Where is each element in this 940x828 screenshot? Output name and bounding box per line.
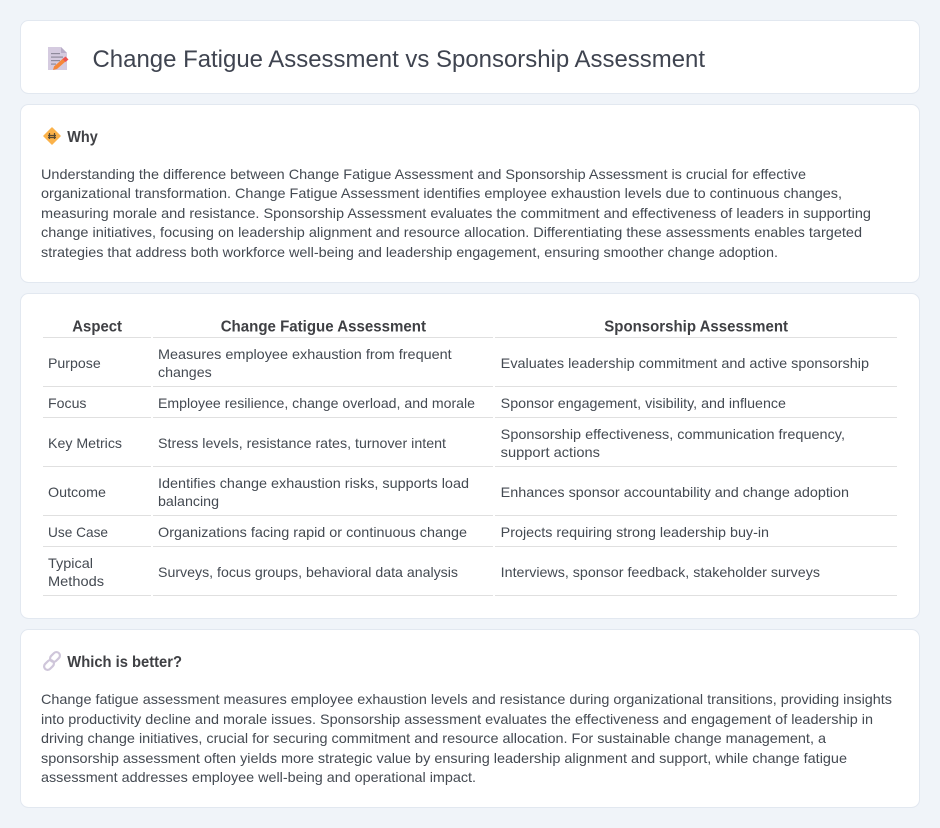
row: use case: Use Case (48, 524, 108, 540)
row: purpose: Purpose (48, 355, 101, 371)
row: key metrics: Stress levels, resistance rates, turnover intent (158, 435, 446, 451)
text block: verdict (41, 691, 892, 785)
table header row: Aspect (72, 318, 122, 336)
row: key metrics (48, 426, 845, 460)
row: use case (48, 524, 769, 540)
text block: verdict: Change fatigue assessment measures employee exhaustion levels and resistance during organizational transitions, providing insights (41, 691, 892, 707)
row: typical methods (48, 555, 820, 589)
row: focus: Employee resilience, change overload, and morale (158, 395, 475, 411)
row: typical methods: Methods (48, 573, 104, 589)
row: purpose (48, 346, 869, 380)
text block: verdict: into productivity decline and morale issues. Sponsorship assessment evaluates the effectiveness and engagement of leadership in (41, 711, 873, 727)
row: key metrics: Sponsorship effectiveness, communication frequency, (501, 426, 845, 442)
row: typical methods: Interviews, sponsor feedback, stakeholder surveys (501, 564, 820, 580)
heading: which is better: Which is better? (67, 654, 182, 671)
panel: which is better (20, 630, 920, 808)
row: outcome (48, 475, 849, 509)
text block: why explanation (41, 166, 871, 260)
text block: verdict: sponsorship assessment often yields more strategic value by ensuring leadership alignment and support, while change fatigue (41, 750, 847, 766)
text block: why explanation: organizational transformation. Change Fatigue Assessment identifies employee exhaustion levels due to continuous changes, (41, 185, 842, 201)
text block: why explanation: strategies that address both workforce well-being and leadership engagement, ensuring smoother change adoption. (41, 244, 778, 260)
row: key metrics: Key Metrics (48, 435, 122, 451)
title: Change Fatigue Assessment vs Sponsorship Assessment (92, 46, 705, 73)
row: use case: Organizations facing rapid or continuous change (158, 524, 467, 540)
text block: why explanation: Understanding the difference between Change Fatigue Assessment and Sponsorship Assessment is crucial for effective (41, 166, 806, 182)
icon: chain link (43, 651, 61, 671)
panel: comparison table (20, 294, 920, 618)
row: purpose: changes (158, 364, 212, 380)
panel: title header (20, 20, 920, 94)
row: outcome: balancing (158, 493, 219, 509)
row: outcome: Enhances sponsor accountability and change adoption (501, 484, 849, 500)
icon: document with pencil (48, 47, 68, 70)
row: typical methods: Typical (48, 555, 93, 571)
panel: why (20, 104, 920, 282)
row: use case: Projects requiring strong leadership buy-in (501, 524, 769, 540)
text block: verdict: driving change initiatives, crucial for securing commitment and resource allocation. For sustainable change management, a (41, 730, 826, 746)
table header row: Change Fatigue Assessment (221, 318, 426, 336)
text block: why explanation: measuring morale and resistance. Sponsorship Assessment evaluates the commitment and effectiveness of leaders in supporting (41, 205, 871, 221)
row: purpose: Measures employee exhaustion from frequent (158, 346, 452, 362)
icon: diamond sign (44, 128, 60, 144)
text block: why explanation: change initiatives, focusing on leadership alignment and resource allocation. Differentiating these assessments enables targeted (41, 224, 862, 240)
row: outcome: Outcome (48, 484, 106, 500)
row: purpose: Evaluates leadership commitment and active sponsorship (501, 355, 869, 371)
row: typical methods: Surveys, focus groups, behavioral data analysis (158, 564, 458, 580)
row: key metrics: support actions (501, 444, 600, 460)
row: focus: Focus (48, 395, 86, 411)
heading: why: Why (67, 129, 98, 146)
row: outcome: Identifies change exhaustion risks, supports load (158, 475, 469, 491)
row: focus (48, 395, 786, 411)
table header row (72, 318, 788, 336)
row: focus: Sponsor engagement, visibility, and influence (501, 395, 786, 411)
table header row: Sponsorship Assessment (604, 318, 788, 336)
text block: verdict: assessment addresses employee well-being and operational impact. (41, 769, 476, 785)
